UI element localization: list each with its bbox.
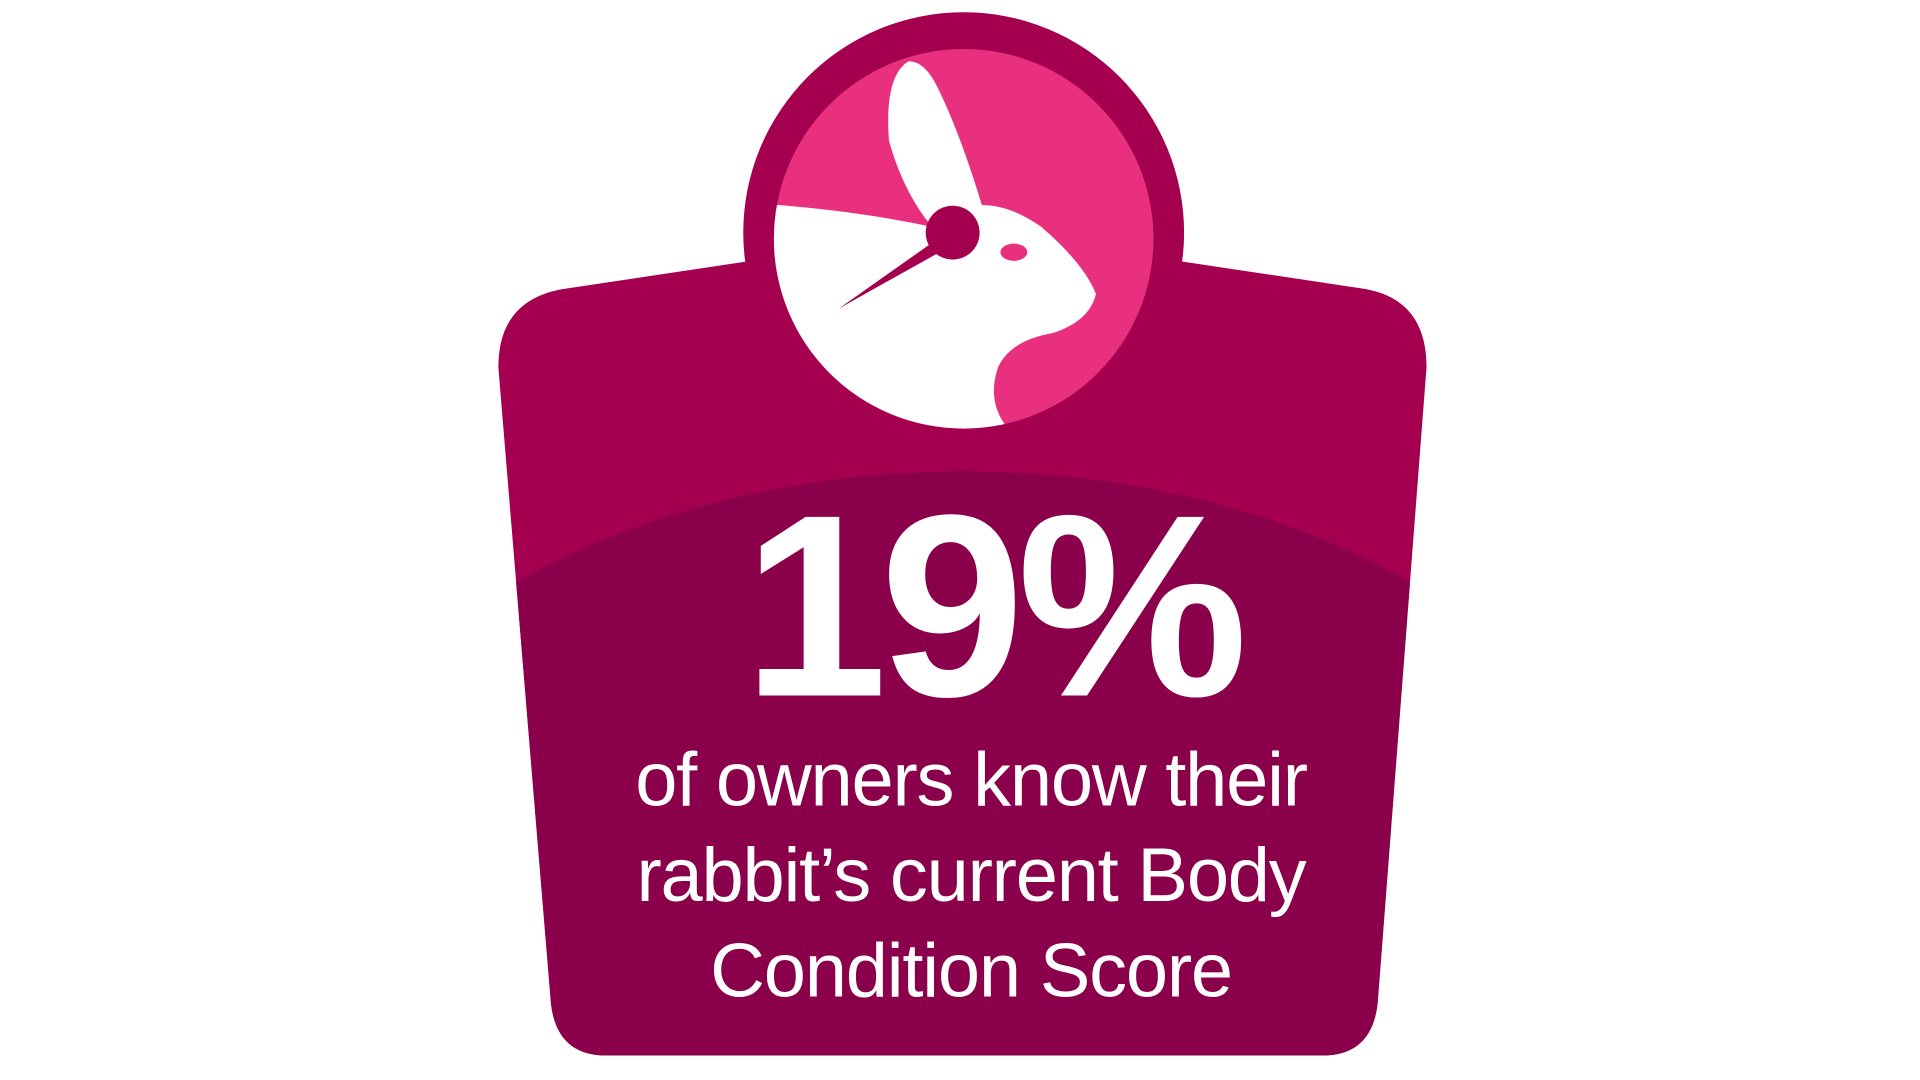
description text	[635, 738, 1308, 1014]
description text: rabbit’s current Body	[636, 833, 1307, 918]
scale body panel	[498, 262, 1426, 1056]
headline stat: 19%	[743, 462, 1244, 752]
icon: scale dial with rabbit	[735, 12, 1184, 453]
description text: Condition Score	[710, 929, 1232, 1014]
description text: of owners know their	[635, 738, 1308, 823]
dark arc band	[516, 472, 1410, 1056]
